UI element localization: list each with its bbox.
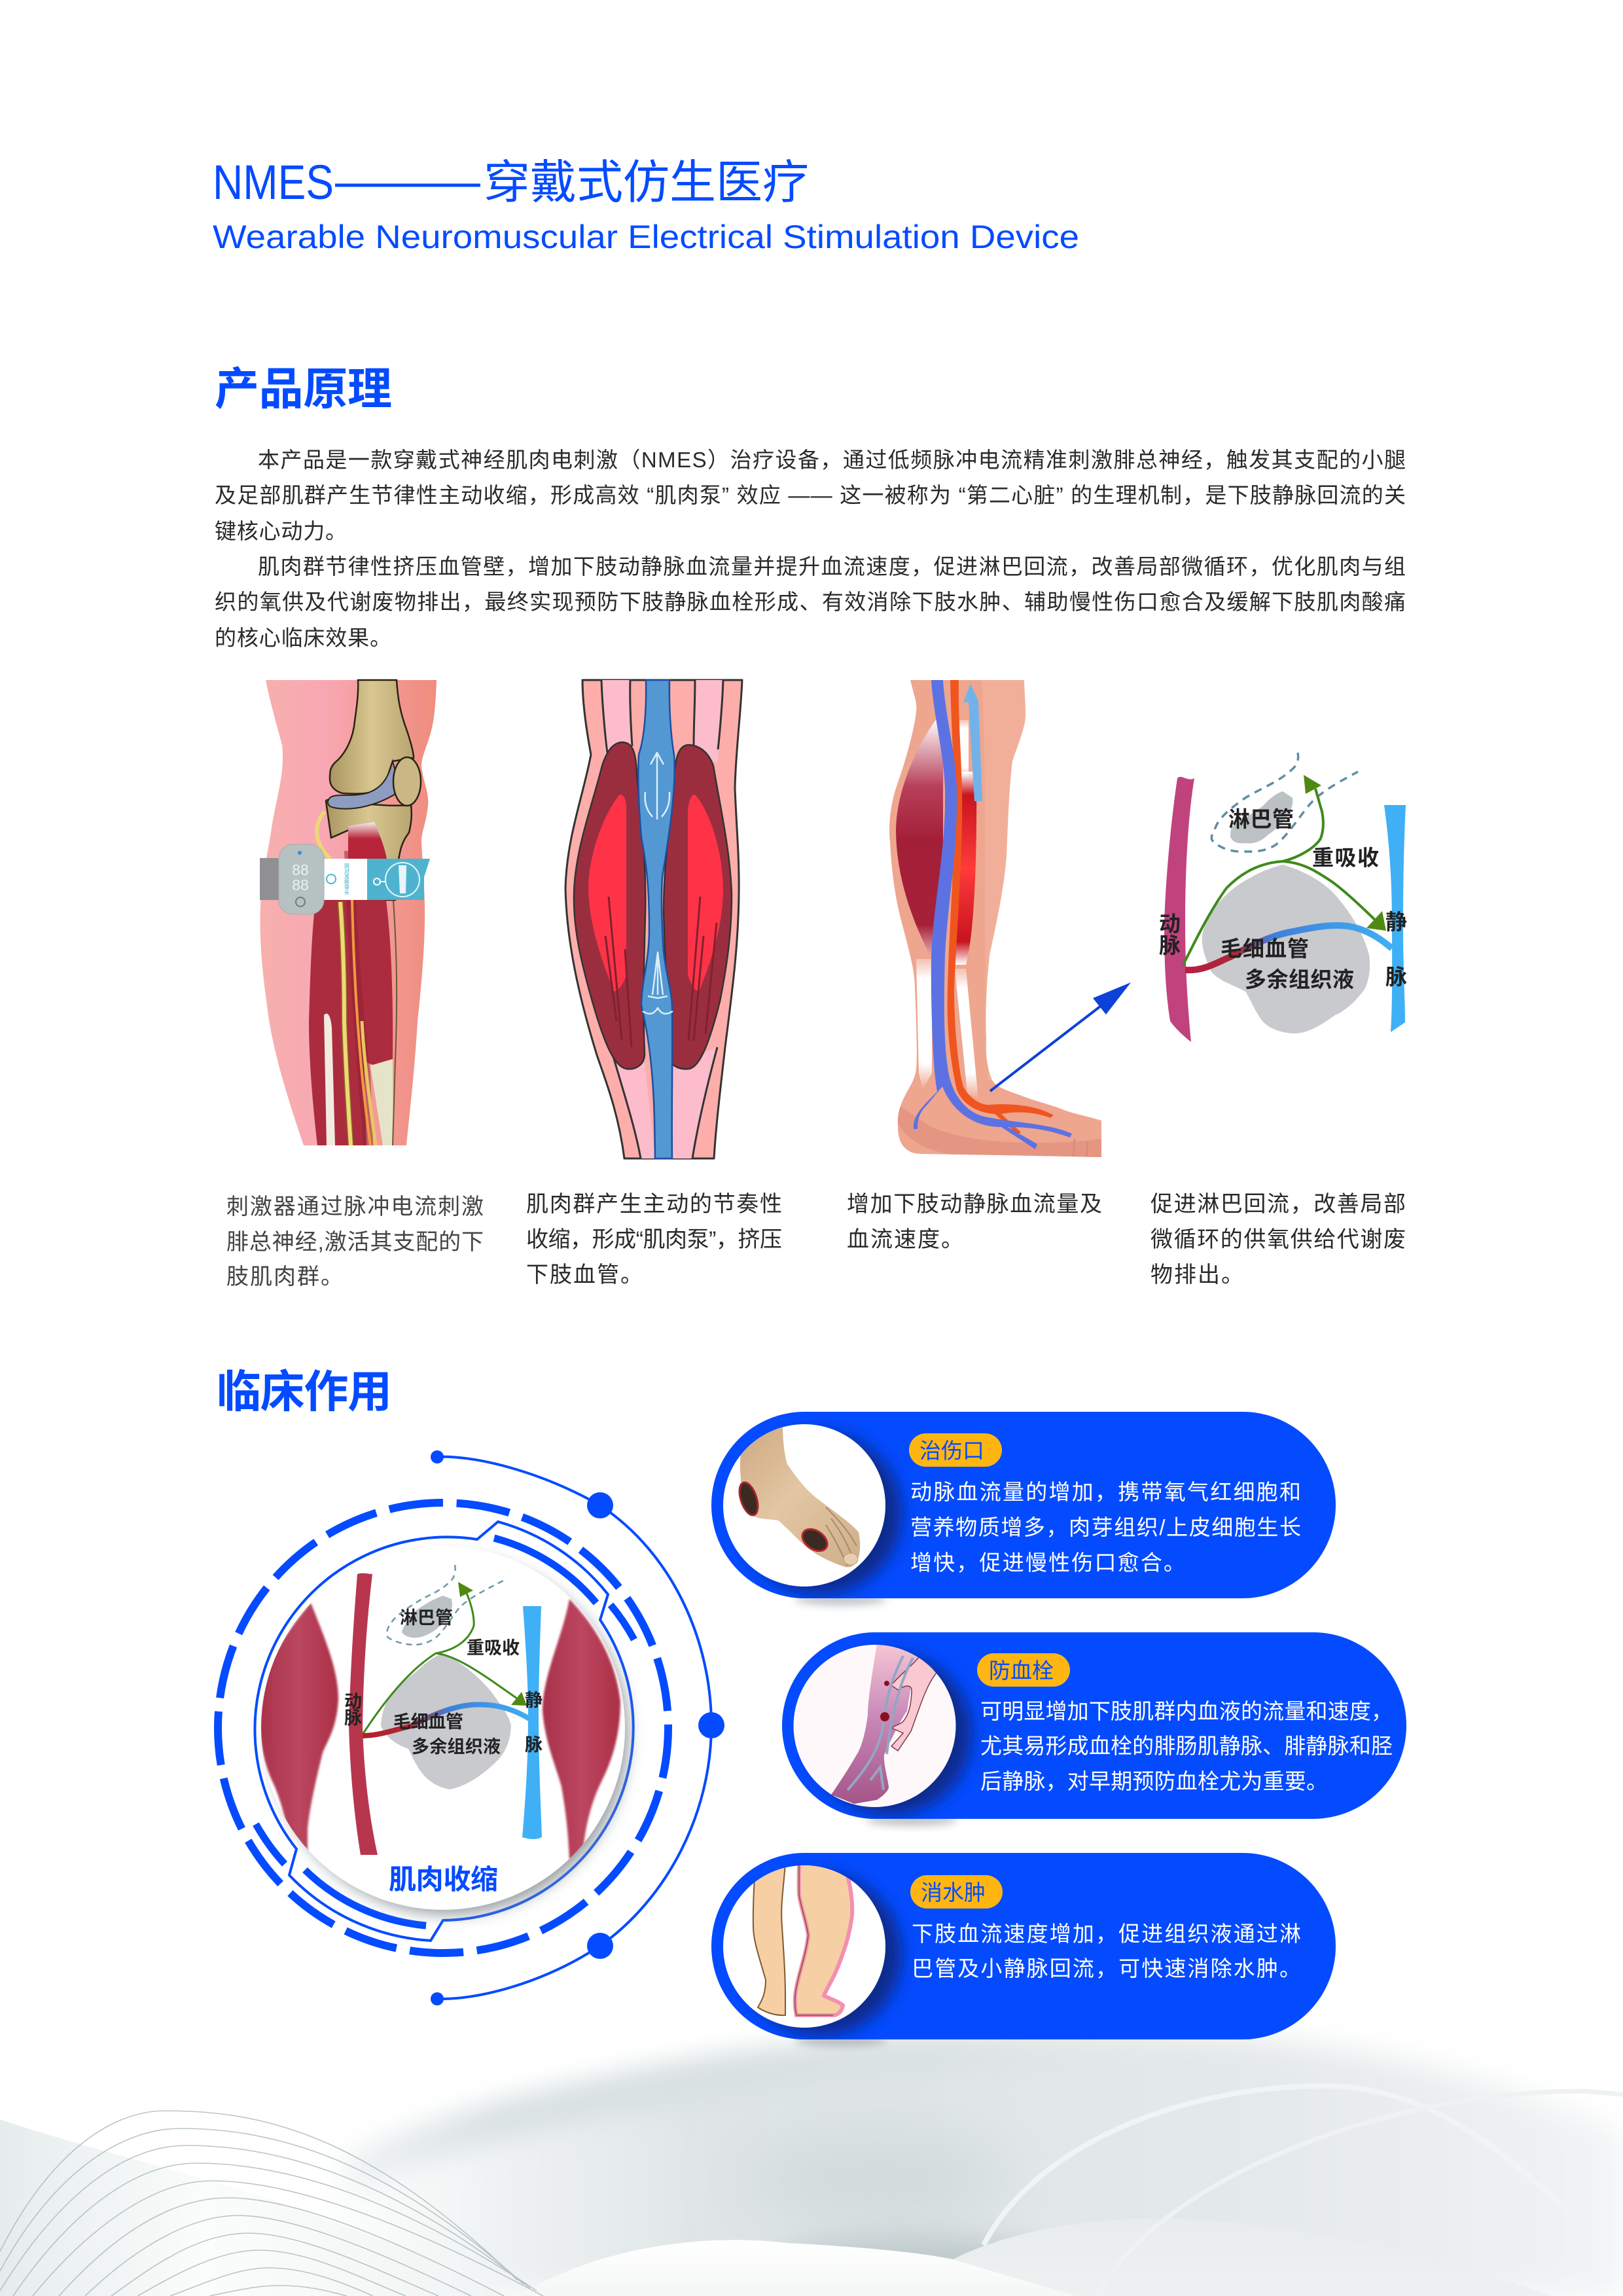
panel: wound healing [711, 1412, 1336, 1605]
icon: foot with wounds [738, 1427, 860, 1567]
badge [977, 1653, 1070, 1687]
text block: principle description: 的核心临床效果。 [215, 626, 391, 650]
badge: 防血栓 [989, 1659, 1054, 1683]
graphic: dashed ring [171, 1456, 715, 2000]
artery [349, 1573, 378, 1855]
heading: product principle: 产品原理 [215, 365, 392, 414]
diagram: capillary exchange: 脉 [1159, 933, 1181, 958]
badge: 消水肿 [921, 1880, 986, 1905]
caption: stimulator [226, 1194, 484, 1289]
panel: thrombosis prevention: 后静脉，对早期预防血栓尤为重要。 [980, 1769, 1328, 1793]
text block: principle description [215, 448, 1406, 650]
arrow: from ankle to capillary diagram [990, 982, 1131, 1091]
right muscle [543, 1599, 620, 1859]
graphic: outer orbit arc with dots [431, 1450, 724, 2005]
left muscle [259, 1603, 338, 1852]
title [213, 154, 809, 209]
vein [522, 1606, 542, 1839]
panel: muscle contraction circle: 脉 [344, 1708, 362, 1728]
strap: 固对准腓骨头 [344, 863, 349, 895]
panel: muscle contraction circle: 多余组织液 [412, 1737, 501, 1757]
diagram: capillary exchange: 重吸收 [1312, 846, 1379, 870]
panel: muscle contraction circle: 静 [525, 1691, 543, 1710]
panel: edema reduction: 巴管及小静脉回流，可快速消除水肿。 [912, 1956, 1301, 1981]
caption: stimulator: 刺激器通过脉冲电流刺激 [226, 1194, 484, 1219]
panel: wound healing: 营养物质增多，肉芽组织/上皮细胞生长 [910, 1515, 1301, 1539]
illustration: knee with stimulator [260, 680, 437, 1145]
caption: lymph return: 物排出。 [1150, 1263, 1243, 1287]
caption: stimulator: 腓总神经,激活其支配的下 [226, 1230, 484, 1255]
device: 88 [292, 876, 309, 893]
caption: muscle pump [526, 1192, 782, 1287]
panel: edema reduction [711, 1853, 1336, 2047]
panel: thrombosis prevention: 可明显增加下肢肌群内血液的流量和速度， [980, 1699, 1393, 1723]
strap [260, 858, 430, 900]
caption: blood flow: 血流速度。 [847, 1227, 963, 1252]
panel: wound healing: 动脉血流量的增加，携带氧气红细胞和 [910, 1480, 1301, 1504]
caption: blood flow: 增加下肢动静脉血流量及 [847, 1192, 1102, 1217]
text block: principle description: 键核心动力。 [215, 519, 347, 543]
panel: muscle contraction circle: 淋巴管 [400, 1608, 453, 1628]
panel: wound healing: 增快，促进慢性伤口愈合。 [910, 1551, 1185, 1575]
panel: edema reduction: 下肢血流速度增加，促进组织液通过淋 [912, 1922, 1301, 1946]
icon: swollen legs [753, 1863, 852, 2015]
text block: principle description: 肌肉群节律性挤压血管壁，增加下肢动静脉血流量并提升血流速度，促进淋巴回流，改善局部微循环，优化肌肉与组 [258, 554, 1406, 579]
badge [909, 1433, 1002, 1467]
illustration: muscle pump cross-section [565, 680, 742, 1158]
caption: lymph return: 促进淋巴回流，改善局部 [1150, 1192, 1406, 1217]
arrows in vein [643, 753, 673, 1014]
badge [910, 1875, 1003, 1909]
text block: principle description: 本产品是一款穿戴式神经肌肉电刺激（NMES）治疗设备，通过低频脉冲电流精准刺激腓总神经，触发其支配的小腿 [258, 448, 1406, 472]
device [279, 844, 324, 914]
diagram: capillary exchange: 毛细血管 [1221, 937, 1309, 961]
background: grey waves at page bottom [0, 2032, 1623, 2296]
diagram: capillary exchange: 静 [1385, 910, 1407, 934]
caption: muscle pump: 下肢血管。 [526, 1263, 643, 1287]
panel: muscle contraction circle: 毛细血管 [393, 1712, 463, 1732]
caption: blood flow [847, 1192, 1102, 1252]
diagram: capillary exchange: 多余组织液 [1245, 967, 1354, 992]
caption: lymph return [1150, 1192, 1406, 1287]
panel: muscle contraction circle: 肌肉收缩 [389, 1864, 498, 1895]
caption: stimulator: 肢肌肉群。 [226, 1265, 343, 1289]
panel: muscle contraction circle: 脉 [525, 1735, 543, 1755]
caption: muscle pump: 肌肉群产生主动的节奏性 [526, 1192, 782, 1217]
icon: leg with clot [831, 1644, 936, 1804]
diagram: capillary exchange: 脉 [1385, 965, 1407, 989]
subtitle: Wearable Neuromuscular Electrical Stimulation Device [213, 219, 1079, 255]
caption: lymph return: 微循环的供氧供给代谢废 [1150, 1227, 1406, 1252]
title: 穿戴式仿生医疗 [484, 157, 809, 209]
panel: muscle contraction circle: 重吸收 [467, 1638, 520, 1658]
text block: principle description: 织的氧供及代谢废物排出，最终实现预防下肢静脉血栓形成、有效消除下肢水肿、辅助慢性伤口愈合及缓解下肢肌肉酸痛 [215, 590, 1406, 614]
diagram: capillary exchange: 动 [1159, 912, 1181, 936]
title: ——— [335, 154, 480, 208]
panel: muscle contraction circle [259, 1546, 628, 1914]
diagram: capillary exchange: 淋巴管 [1228, 807, 1294, 831]
heading: clinical effects: 临床作用 [217, 1367, 392, 1417]
badge: 治伤口 [919, 1439, 984, 1463]
text block: principle description: 及足部肌群产生节律性主动收缩，形成高效 “肌肉泵” 效应 —— 这一被称为 “第二心脏” 的生理机制，是下肢静脉回流的关 [215, 483, 1406, 507]
panel: thrombosis prevention [782, 1632, 1406, 1826]
diagram: capillary exchange [1159, 753, 1407, 1042]
device: 88 [292, 861, 309, 878]
panel: muscle contraction circle: 动 [344, 1692, 362, 1712]
title: NMES [213, 155, 334, 209]
caption: muscle pump: 收缩，形成“肌肉泵”，挤压 [526, 1227, 782, 1252]
illustration: lower leg veins and arteries [889, 680, 1101, 1157]
grey tissue fluid [381, 1653, 511, 1789]
panel: thrombosis prevention: 尤其易形成血栓的腓肠肌静脉、腓静脉和胫 [980, 1734, 1393, 1758]
